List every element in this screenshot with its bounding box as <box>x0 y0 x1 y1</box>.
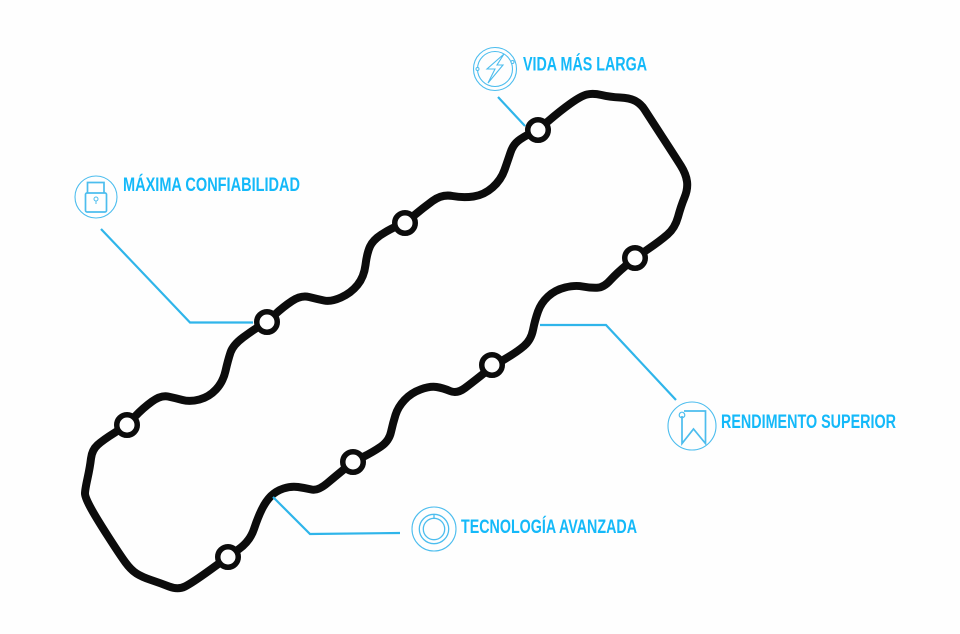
icon: bookmark <box>668 402 716 450</box>
label: máxima confiabilidad: MÁXIMA CONFIABILIDAD <box>123 173 300 196</box>
label: vida más larga: VIDA MÁS LARGA <box>523 52 647 76</box>
leader line: máxima confiabilidad <box>101 229 253 322</box>
gasket bolt holes <box>117 120 645 567</box>
leader line: tecnología avanzada <box>273 497 400 534</box>
icon: padlock <box>75 176 117 218</box>
label: tecnología avanzada: TECNOLOGÍA AVANZADA <box>461 515 637 538</box>
callout: rendimiento superior <box>540 325 896 450</box>
callout: tecnología avanzada <box>273 497 637 551</box>
label: rendimiento superior: RENDIMENTO SUPERIOR <box>721 411 896 433</box>
icon: concentric rings <box>412 507 456 551</box>
leader line: vida más larga <box>498 97 525 126</box>
callout: máxima confiabilidad <box>75 173 300 322</box>
gasket illustration <box>85 94 687 588</box>
callout: vida más larga <box>474 48 647 126</box>
leader line: rendimiento superior <box>540 325 676 400</box>
icon: lightning bolt <box>474 48 516 90</box>
